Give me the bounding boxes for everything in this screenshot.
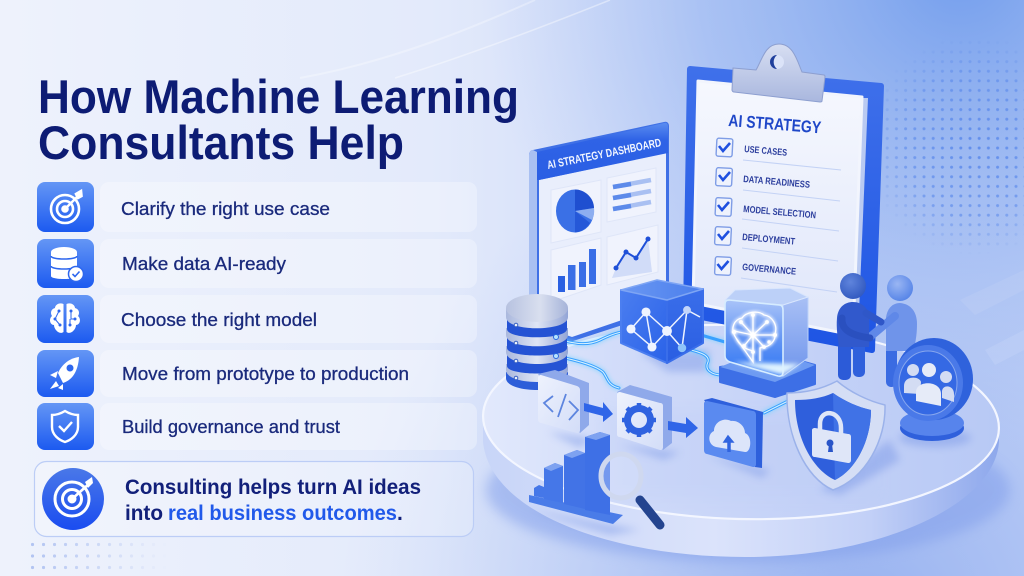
arrow: code to gear	[584, 402, 613, 422]
checklist: DATA READINESS	[743, 174, 810, 191]
network graph	[627, 307, 700, 352]
team badge	[893, 338, 973, 441]
icon: target badge	[42, 468, 104, 530]
callout: Consulting helps turn AI ideas	[125, 476, 421, 499]
person: consultant left	[837, 273, 881, 380]
row: clarify the right use case	[37, 182, 477, 232]
row: build governance and trust	[37, 403, 477, 450]
row: choose the right model: Choose the right model	[121, 309, 317, 330]
icon: gear	[622, 403, 656, 437]
callout: real business outcomes	[168, 502, 397, 525]
title	[38, 70, 519, 169]
checklist: MODEL SELECTION	[743, 204, 817, 221]
icon: cloud with arrow	[709, 420, 750, 452]
tile: code	[538, 370, 589, 433]
bar chart with magnifier	[529, 432, 660, 525]
row: make data AI-ready	[37, 239, 477, 288]
clipboard	[686, 44, 881, 350]
icon: shield with check	[52, 411, 78, 442]
checklist: USE CASES	[744, 144, 788, 159]
dashboard header	[537, 123, 668, 180]
title: How Machine Learning	[38, 70, 519, 123]
card: line chart	[607, 225, 658, 285]
row: choose the right model	[37, 295, 477, 343]
icon: database with check	[51, 247, 84, 282]
card: bar chart	[551, 238, 601, 302]
checklist paper	[693, 81, 862, 335]
checklist: DEPLOYMENT	[742, 232, 796, 248]
glass right face	[783, 297, 808, 376]
callout	[34, 462, 474, 536]
callout: .	[397, 502, 403, 525]
person: consultant right	[870, 275, 917, 387]
icon: three people	[904, 363, 954, 406]
tile: cloud upload	[704, 398, 763, 468]
glowing connectors	[556, 332, 806, 413]
arrow: gear to cloud	[668, 417, 698, 438]
icon: brain	[50, 303, 80, 333]
row: make data AI-ready: Make data AI-ready	[122, 253, 287, 274]
icon: magnifier	[601, 454, 660, 525]
network cube	[621, 280, 703, 363]
clip	[732, 44, 825, 102]
database cylinder	[506, 294, 568, 390]
icon: target with arrow	[51, 191, 82, 223]
object shadows	[530, 350, 971, 535]
title: Consultants Help	[38, 116, 404, 169]
dashboard panel: AI STRATEGY DASHBOARD	[546, 137, 662, 172]
row: move from prototype to production	[37, 350, 477, 397]
checklist: GOVERNANCE	[742, 262, 796, 278]
platform disc	[481, 318, 1010, 562]
clipboard heading: AI STRATEGY	[728, 111, 822, 137]
dot pattern: bottom left	[31, 542, 144, 570]
callout: into	[125, 502, 163, 525]
icon: glowing brain	[732, 312, 777, 362]
glass front face	[725, 300, 783, 376]
dashboard panel	[529, 122, 669, 342]
shield with padlock	[787, 381, 885, 490]
tile: gear	[617, 385, 672, 450]
row: clarify the right use case: Clarify the right use case	[121, 198, 330, 219]
row: build governance and trust: Build governance and trust	[122, 416, 340, 437]
checklist	[715, 138, 841, 292]
row: move from prototype to production: Move from prototype to production	[122, 363, 409, 384]
dot pattern: top right	[886, 51, 1024, 246]
dashboard screen	[539, 153, 666, 337]
card: pie chart	[551, 180, 601, 243]
brain glass cube	[720, 288, 815, 397]
card: horizontal bars	[607, 168, 656, 222]
icon: rocket	[50, 357, 79, 390]
icon: padlock	[812, 413, 851, 463]
